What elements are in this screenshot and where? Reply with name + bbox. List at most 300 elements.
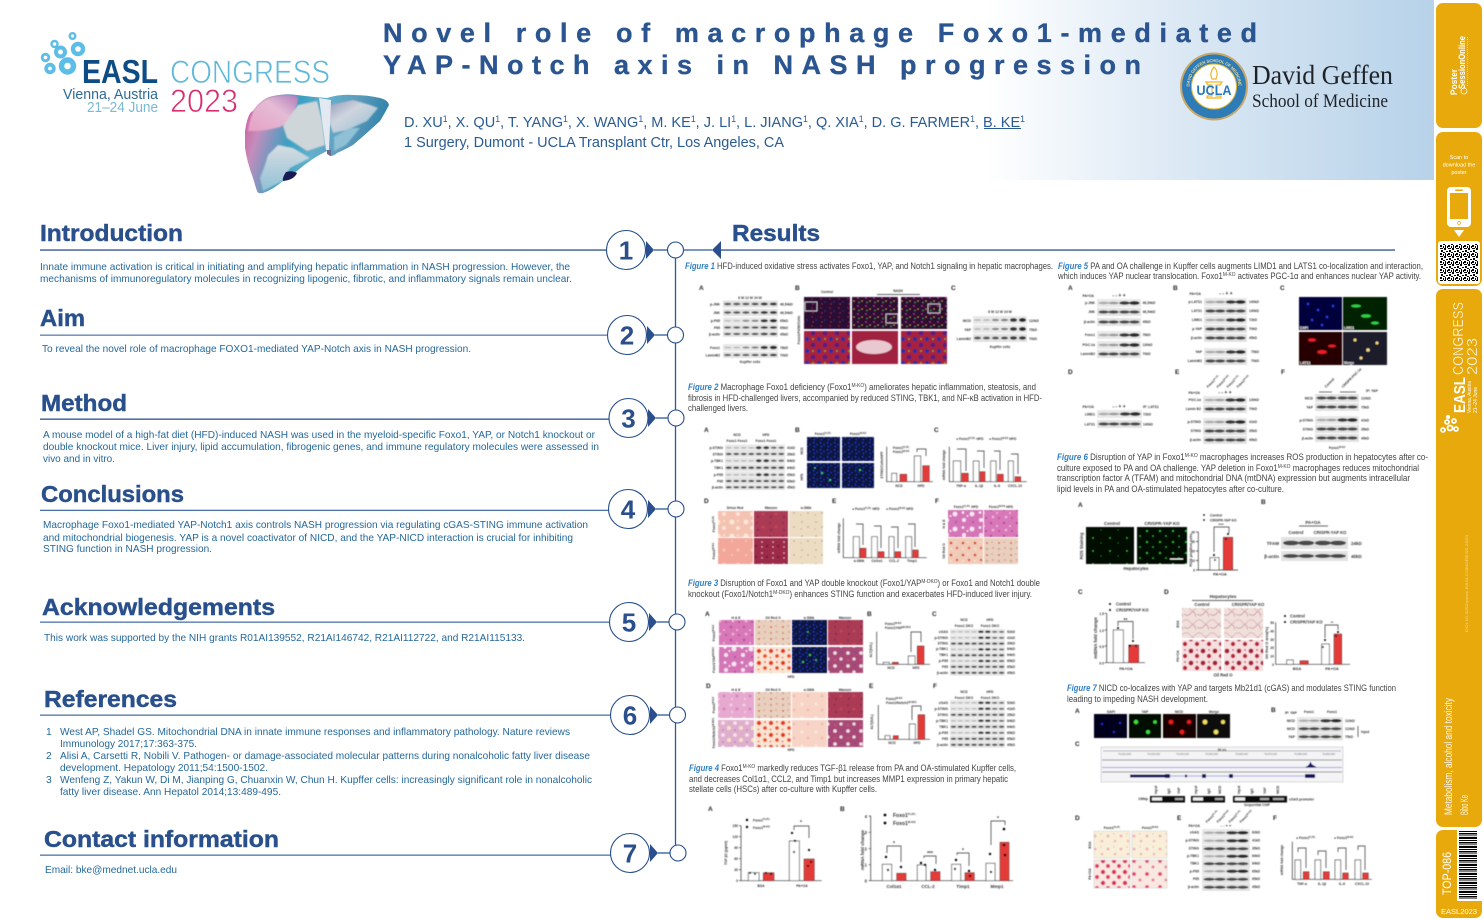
title: [383, 18, 1257, 80]
figure 3C western blot: p-TBK1: [936, 647, 948, 651]
figure 2A western blot: 84kD: [787, 466, 796, 470]
figure 3F western blot: p-P65: [939, 731, 948, 735]
figure 4B bar chart: mRNA fold change: 1: [865, 862, 868, 868]
figure 2A western blot: Foxo1 Foxo1: [727, 439, 748, 443]
figure 2: [688, 382, 1042, 564]
figure 5D immunoprecipitation blot: - - + +: [1112, 404, 1126, 410]
figure 2A western blot: 65kD: [787, 473, 796, 477]
figure 5B western blot: LaminB2: [1188, 359, 1202, 363]
figure 5B western blot: YAP: [1195, 350, 1203, 354]
figure 5 caption: Figure 5 PA and OA challenge in Kupffer cells augments LIMD1 and LATS1 co-localization and interaction,: [1058, 261, 1423, 271]
figure 3A histology: H & E: [731, 616, 741, 620]
figure 7E western blot: FL/FL: [1212, 809, 1219, 816]
figure 2F histology: M-KO: [999, 505, 1005, 508]
sidebar panel: congress: [1436, 289, 1482, 827]
figure 6A ROS staining and bar chart: [1078, 502, 1238, 576]
sidebar panel: poster session online: SessionOnline: [1457, 36, 1467, 89]
figure 2D histology: Masson: [765, 506, 777, 510]
authors and affiliation: 1: [859, 114, 864, 124]
figure 6: [1057, 452, 1428, 678]
figure 6 caption: M-KO: [1185, 453, 1198, 459]
figure 5A western blot: 45kD: [1142, 320, 1151, 324]
figure 7C genome track and gel: NICD: [1276, 785, 1280, 794]
figure 6A ROS staining and bar chart: Control: [1104, 521, 1120, 526]
figure 2A western blot: STING: [713, 452, 723, 456]
figure 5B western blot: p-LATS1: [1188, 300, 1202, 304]
EASL Congress logo: [42, 33, 330, 119]
figure 3F western blot: P65: [942, 737, 948, 741]
figure 3D histology: D: [706, 683, 711, 690]
figure 4B bar chart: mRNA fold change: Timp1: [956, 884, 970, 889]
figure 5F immunoprecipitation blot: F: [1281, 369, 1285, 376]
figure 6 caption: M-KO: [1278, 464, 1291, 470]
authors and affiliation: 1: [970, 114, 975, 124]
figure 3 caption: M-DKO: [773, 590, 790, 596]
figure 5E western blot: Foxo1: [1226, 379, 1236, 389]
figure 3C western blot: P65: [942, 665, 948, 669]
figure 3D histology: Masson: [839, 688, 851, 692]
figure 3E bar chart: E: [869, 683, 874, 690]
EASL Congress logo: Vienna, Austria: [63, 87, 159, 103]
sidebar panel: congress: EASL: [1452, 377, 1469, 413]
sidebar panel: abstract code and barcode: EASL2023: [1441, 907, 1477, 916]
figure 5C immunofluorescence: DAPI: [1300, 326, 1308, 330]
figure 5C immunofluorescence: [1280, 285, 1387, 365]
figure 7D histology: M-KO: [1152, 826, 1158, 829]
figure 3D histology: [706, 683, 863, 752]
figure 2A western blot: 45kD: [787, 486, 796, 490]
figure 5E western blot: FL/FL: [1233, 374, 1240, 381]
figure 5F immunoprecipitation blot: 41kD: [1361, 418, 1370, 422]
figure 6C bar chart: 0.5: [1099, 645, 1104, 649]
figure 2B immunofluorescence and bar chart: Foxo1: [850, 432, 860, 436]
figure 7F bar chart: IL-1β: [1318, 882, 1326, 886]
figure 3C western blot: Foxo1 DKO: [981, 624, 1000, 628]
panel: references: 3: [46, 775, 52, 786]
figure 6A ROS staining and bar chart: PA+OA: [1213, 572, 1227, 576]
figure 2B immunofluorescence and bar chart: Foxo1: [893, 450, 903, 454]
figure 4A bar chart: TGF-beta1: 30: [734, 868, 738, 872]
panel: references: Alisi A, Carsetti R, Nobili V. Pathogen- or damage-associated molecular patterns during nonalcoholic fatty liver disease: [60, 751, 590, 762]
figure 2B immunofluorescence and bar chart: B: [795, 427, 800, 434]
figure 7D histology: [1075, 815, 1167, 888]
figure 7B blot: 110kD: [1345, 727, 1355, 731]
figure 7C genome track and gel: 76,680,000: [1294, 752, 1308, 756]
figure 7E western blot: M-KO: [1246, 809, 1253, 816]
figure 7E western blot: Foxo1: [1239, 814, 1249, 824]
figure 6C bar chart: PA+OA: [1119, 666, 1133, 671]
figure 1A western blot: 65kD: [780, 319, 789, 323]
figure 7E western blot: Foxo1: [1216, 814, 1226, 824]
figure 5F immunoprecipitation blot: 75kD: [1361, 406, 1370, 410]
figure 7C genome track and gel: IgG: [1167, 788, 1171, 794]
sidebar panel: congress: Vienna, Austria: [1467, 380, 1473, 413]
figure 6B western blot: [1261, 499, 1363, 561]
figure 5 caption: activates PGC-1α and enhances nuclear YAP activity.: [1235, 271, 1421, 281]
icon: arrow down: [1454, 230, 1464, 237]
figure 5 caption: which induces YAP nuclear translocation. Foxo1: [1058, 271, 1245, 281]
figure 1A western blot: [699, 285, 793, 364]
figure 7E western blot: TBK1: [1190, 862, 1199, 866]
figure 3C western blot: p-STING: [934, 636, 948, 640]
figure 7C genome track and gel: Input: [1154, 785, 1158, 794]
figure 3A histology: α-SMA: [804, 616, 815, 620]
figure 7D histology: D: [1075, 815, 1080, 822]
figure 1B immunofluorescence: B: [795, 285, 800, 292]
figure 5A western blot: - - + +: [1112, 293, 1126, 299]
figure 2E bar chart: mRNA fold change: [837, 523, 841, 553]
figure 3F western blot: 35kD: [1007, 713, 1016, 717]
figure 5B western blot: LIMD1: [1192, 318, 1202, 322]
figure 7F bar chart: TNF-α: [1297, 882, 1308, 886]
figure 1A western blot: 78kD: [780, 346, 789, 350]
figure 7D histology: Foxo1: [1142, 826, 1152, 830]
step marker 6: 6: [623, 700, 637, 730]
figure 6D oil red O and bar chart: BSA: [1293, 666, 1301, 671]
authors and affiliation: , X. QU: [448, 114, 495, 131]
figure 4B bar chart: mRNA fold change: 2: [865, 846, 868, 852]
authors and affiliation: 1: [731, 114, 736, 124]
figure 2D histology: FL/FL: [712, 515, 715, 522]
figure 6D oil red O and bar chart: Control: [1290, 614, 1305, 618]
panel: results heading: Results: [732, 220, 820, 246]
panel: method: vivo and in vitro.: [43, 454, 115, 465]
figure 7D histology: Foxo1: [1104, 826, 1114, 830]
figure 4 caption: [689, 763, 1016, 794]
authors and affiliation: [404, 114, 1025, 151]
figure 3D histology: H & E: [731, 688, 741, 692]
icon: liver illustration: [245, 94, 389, 193]
figure 5E western blot: PGC-1α: [1189, 398, 1202, 402]
figure 6 caption: Figure 6 Disruption of YAP in Foxo1: [1057, 452, 1195, 462]
figure 7C genome track and gel: 76,630,000: [1147, 752, 1161, 756]
figure 2 caption: fibrosis in HFD-challenged livers, accompanied by reduced STING, TBK1, and NF-κB activation in HFD-: [688, 393, 1042, 403]
figure 7B blot: NICD: [1287, 719, 1296, 723]
sidebar panel: scan to download: Scan to: [1450, 155, 1468, 161]
figure 7A immunofluorescence: Merge: [1209, 710, 1219, 714]
figure 2F histology: Foxo1: [989, 505, 999, 509]
figure 5: [1057, 261, 1423, 450]
figure 5B western blot: 70kD: [1251, 359, 1260, 363]
figure 1A western blot: Foxo1: [710, 346, 720, 350]
figure 3F western blot: 52kD: [1007, 701, 1016, 705]
authors and affiliation: , X. WANG: [568, 114, 638, 131]
figure 1C western blot: YAP: [964, 328, 972, 332]
figure 5E western blot: 35kD: [1249, 429, 1258, 433]
authors and affiliation: 1: [495, 114, 500, 124]
figure 4 caption: M-KO: [743, 764, 756, 770]
figure 2 caption: [688, 382, 1042, 413]
figure 2 caption: M-KO: [851, 383, 865, 389]
figure 3C western blot: C: [932, 611, 937, 618]
panel: references: Immunology 2017;17:363-375.: [60, 739, 197, 750]
figure 2A western blot: 35kD: [787, 452, 796, 456]
figure 2E bar chart: FL/FL: [865, 507, 872, 510]
figure 5B western blot: p-YAP: [1192, 327, 1203, 331]
figure 2A western blot: HFD: [763, 433, 770, 437]
panel: acknowledgements: [40, 594, 685, 644]
figure 5E western blot: 45kD: [1249, 438, 1258, 442]
figure 3A histology: A: [705, 611, 710, 618]
figure 2A western blot: 41kD: [787, 446, 796, 450]
figure 6D oil red O and bar chart: BSA: [1176, 620, 1180, 628]
figure 7 caption: leading to impeding NASH development.: [1067, 694, 1208, 704]
figure 1 caption: Figure 1 HFD-induced oxidative stress activates Foxo1, YAP, and Notch1 signaling in hepatic macrophages.: [685, 261, 1053, 271]
figure 7B blot: Foxo1: [1304, 710, 1314, 714]
figure 7B blot: IP: YAP: [1285, 711, 1298, 715]
sidebar panel: scan to download: download the: [1443, 162, 1475, 168]
figure 7E western blot: 35kD: [1252, 846, 1261, 850]
figure 5E western blot: M-KO: [1223, 374, 1230, 381]
David Geffen School of Medicine wordmark: David Geffen: [1252, 60, 1393, 90]
figure 7B blot: Input: [1361, 730, 1370, 734]
figure 3F western blot: 65kD: [1007, 737, 1016, 741]
figure 7E western blot: cGAS: [1190, 830, 1200, 834]
figure 5F immunoprecipitation blot: Control: [1324, 377, 1335, 389]
figure 6D oil red O and bar chart: D: [1164, 589, 1169, 596]
figure 4B bar chart: mRNA fold change: 3: [865, 830, 868, 835]
sidebar panel: poster session online: [1436, 3, 1482, 128]
figure 5C immunofluorescence: Merge: [1344, 361, 1354, 365]
step marker 6: [610, 696, 686, 734]
figure 1A western blot: 46,54kD: [780, 302, 793, 306]
authors and affiliation: 1: [638, 114, 643, 124]
figure 6D oil red O and bar chart: [1164, 589, 1350, 678]
figure 2D histology: M-KO: [712, 543, 715, 549]
figure 3E bar chart: ALT(IU/L): [870, 714, 874, 730]
panel: references: 1: [46, 727, 52, 738]
authors and affiliation: , D. G. FARMER: [864, 114, 970, 131]
figure 5A western blot: 78kD: [1142, 333, 1151, 337]
authors and affiliation: , M. KE: [643, 114, 691, 131]
figure 7E western blot: p-TBK1: [1187, 854, 1199, 858]
figure 6C bar chart: CRISPR/YAP KO: [1116, 608, 1149, 612]
figure 5B western blot: LATS1: [1192, 309, 1202, 313]
figure 3A histology: M-KO: [712, 625, 715, 631]
figure 4B bar chart: mRNA fold change: Foxo1: [893, 821, 908, 827]
figure 4: [689, 763, 1016, 889]
figure 5B western blot: - - + +: [1219, 291, 1233, 297]
sidebar panel: congress: Metabolism, alcohol and toxicity: [1443, 698, 1455, 815]
figure 7B blot: 110kD: [1345, 719, 1355, 723]
figure 3 caption: Figure 3 Disruption of Foxo1 and YAP double knockout (Foxo1/YAP: [688, 578, 948, 588]
figure 6D oil red O and bar chart: **: [1331, 621, 1334, 625]
figure 3F western blot: 84kD: [1007, 725, 1016, 729]
figure 1C western blot: 8 W 12 W 24 W: [988, 310, 1013, 314]
icon: phone: [1447, 187, 1471, 227]
figure 1A western blot: 45kD: [780, 332, 789, 336]
figure 5A western blot: [1068, 285, 1156, 358]
figure 3C western blot: 65kD: [1007, 659, 1016, 663]
step marker 2: 2: [620, 320, 634, 350]
figure 3A histology: Foxo1: [712, 631, 716, 641]
figure 3A histology: M-DKO: [712, 647, 715, 655]
figure 3C western blot: [932, 611, 1016, 676]
figure 2C bar chart: IL-1β: [975, 484, 983, 488]
figure 7B blot: YAP: [1288, 735, 1296, 739]
figure 3 caption: ) or Foxo1 and Notch1 double: [937, 578, 1040, 588]
UCLA seal: DAVID GEFFEN SCHOOL OF MEDICINE: [1186, 59, 1242, 86]
figure 4 caption: and decreases Col1α1, CCL2, and Timp1 but increases MMP1 expression in primary hepatic: [689, 774, 1009, 784]
figure 5E western blot: 41kD: [1249, 420, 1258, 424]
figure 2B immunofluorescence and bar chart: NCD: [895, 484, 903, 488]
figure 7: [1067, 683, 1396, 891]
figure 4B bar chart: mRNA fold change: [840, 806, 1013, 889]
figure 7C genome track and gel: cGAS promoter: [1289, 798, 1315, 802]
figure 5E western blot: Foxo1: [1206, 379, 1216, 389]
panel: contact information: [40, 826, 686, 876]
figure 4A bar chart: TGF-beta1: [708, 806, 822, 888]
QR code: [1438, 241, 1480, 284]
figure 3F western blot: STING: [938, 713, 948, 717]
figure 4A bar chart: TGF-beta1: PA+OA: [796, 884, 808, 888]
title: Novel role of macrophage Foxo1-mediated: [383, 18, 1257, 48]
figure 7F bar chart: mRNA fold change: [1280, 845, 1284, 875]
panel: aim: [40, 305, 684, 355]
figure 6C bar chart: mtDNA fold change: [1093, 617, 1098, 659]
figure 6B western blot: TFAM: [1267, 541, 1279, 546]
figure 3F western blot: NCD: [960, 690, 968, 694]
figure 2B immunofluorescence and bar chart: Foxo1: [815, 432, 825, 436]
panel: references: West AP, Shadel GS. Mitochondrial DNA in innate immune responses and inflammatory pathology. Nature reviews: [60, 727, 570, 738]
sidebar panel: scan to download: [1436, 132, 1482, 286]
figure 3D histology: M-KO: [712, 697, 715, 703]
authors and affiliation: 1 Surgery, Dumont - UCLA Transplant Ctr, Los Angeles, CA: [404, 134, 784, 151]
figure 6B western blot: CRISPR-YAP KO: [1314, 530, 1347, 535]
figure 3B bar chart: M-KO: [895, 622, 902, 625]
figure 7F bar chart: M-KO: [1347, 836, 1353, 839]
figure 5E western blot: - - + +: [1218, 390, 1232, 396]
figure 7E western blot: 41kD: [1252, 838, 1261, 842]
figure 7E western blot: 65kD: [1252, 877, 1261, 881]
figure 3F western blot: β-actin: [937, 743, 948, 747]
figure 2A western blot: [704, 427, 796, 490]
figure 7E western blot: Foxo1: [1228, 814, 1238, 824]
figure 2F histology: HFD: [1005, 505, 1014, 509]
figure 3B bar chart: M-DKO: [903, 626, 911, 629]
figure 5A western blot: p-JNK: [1085, 301, 1096, 305]
figure 3F western blot: [933, 683, 1016, 748]
figure 2C bar chart: IL-6: [994, 484, 1000, 488]
figure 4B bar chart: mRNA fold change: *: [893, 841, 895, 847]
figure 3C western blot: 45kD: [1007, 671, 1016, 675]
figure 2F histology: HFD: [970, 505, 979, 509]
figure 3D histology: Foxo1/Notch1: [712, 726, 716, 748]
authors and affiliation: , T. YANG: [500, 114, 563, 131]
step marker 7: 7: [623, 838, 637, 868]
figure 2E bar chart: [832, 498, 927, 563]
figure 5C immunofluorescence: C: [1280, 285, 1285, 292]
sidebar panel: congress: Bibo Ke: [1459, 795, 1471, 815]
figure 3C western blot: cGAS: [939, 630, 949, 634]
figure 3C western blot: 52kD: [1007, 630, 1016, 634]
figure 3D histology: HFD: [788, 748, 795, 752]
EASL Congress logo: EASL: [82, 53, 158, 90]
figure 5B western blot: [1173, 285, 1260, 365]
figure 6D oil red O and bar chart: CRISPR/YAP KO: [1290, 620, 1323, 624]
figure 7C genome track and gel: YAP: [1177, 787, 1181, 794]
figure 4A bar chart: TGF-beta1: 0: [736, 879, 738, 883]
figure 2C bar chart: M-KO: [1002, 437, 1008, 440]
figure 6A ROS staining and bar chart: ****: [1218, 523, 1224, 527]
figure 6B western blot: B: [1261, 499, 1266, 506]
figure 3C western blot: 41kD: [1007, 636, 1016, 640]
figure 2A western blot: β-actin: [712, 486, 723, 490]
figure 2A western blot: p-STING: [709, 446, 723, 450]
figure 7E western blot: 62kD: [1252, 830, 1261, 834]
figure 4B bar chart: mRNA fold change: *: [962, 848, 964, 854]
figure 2F histology: Foxo1: [954, 505, 964, 509]
figure 7E western blot: FL/FL: [1235, 809, 1242, 816]
figure 7C genome track and gel: 76,690,000: [1322, 752, 1336, 756]
panel: references: References: [44, 686, 177, 712]
figure 2C bar chart: C: [934, 427, 939, 434]
figure 7E western blot: Foxo1: [1205, 814, 1215, 824]
figure 7C genome track and gel: 76,660,000: [1235, 752, 1249, 756]
figure 3C western blot: NCD: [960, 618, 968, 622]
figure 3B bar chart: Foxo1: [885, 622, 895, 626]
figure 6 caption: lipid levels in PA and OA-stimulated hepatocytes after co-culture.: [1057, 484, 1284, 494]
figure 5A western blot: 46,54kD: [1142, 301, 1156, 305]
figure 6B western blot: β-actin: [1264, 554, 1279, 559]
figure 6A ROS staining and bar chart: A: [1078, 502, 1083, 509]
figure 7A immunofluorescence: NICD: [1175, 710, 1184, 714]
figure 5A western blot: β-actin: [1084, 320, 1095, 324]
figure 2F histology: Oil Red O: [942, 543, 946, 559]
figure 5D immunoprecipitation blot: LIMD1: [1085, 412, 1095, 416]
figure 7B blot: NICD: [1287, 727, 1296, 731]
figure 6 caption: culture exposed to PA and OA challenge. YAP deletion in Foxo1: [1057, 463, 1305, 473]
figure 3E bar chart: [869, 683, 930, 745]
figure 5E western blot: Foxo1: [1236, 379, 1246, 389]
step marker 1: 1: [619, 236, 633, 266]
sidebar panel: congress: 2023: [1464, 338, 1481, 375]
figure 1A western blot: p-P65: [711, 319, 720, 323]
figure 7C genome track and gel: 196bp: [1138, 797, 1148, 801]
figure 5F immunoprecipitation blot: STING: [1303, 428, 1313, 432]
step marker 5: 5: [622, 608, 636, 638]
figure 2E bar chart: Col1α1: [871, 559, 883, 563]
header background: [0, 0, 1434, 180]
EASL Congress logo: CONGRESS: [170, 54, 330, 90]
authors and affiliation: 1: [803, 114, 808, 124]
panel: method: [40, 390, 684, 465]
figure 3E bar chart: Foxo1/Notch1: [886, 701, 908, 705]
figure 4B bar chart: mRNA fold change: B: [840, 806, 845, 813]
figure 7E western blot: β-actin: [1188, 885, 1199, 889]
figure 2A western blot: 84kD: [787, 459, 796, 463]
figure 7D histology: FL/FL: [1114, 826, 1121, 829]
sidebar panel: abstract code and barcode: TOP-086: [1440, 852, 1454, 895]
figure 2C bar chart: ● Foxo1: [956, 437, 969, 441]
figure 4A bar chart: TGF-beta1: FL/FL: [763, 817, 770, 821]
figure 7C genome track and gel: Sequential ChIP: [1244, 803, 1271, 807]
figure 3C western blot: HFD: [987, 618, 994, 622]
figure 1A western blot: P65: [714, 326, 720, 330]
figure 4A bar chart: TGF-beta1: Foxo1: [753, 826, 763, 830]
figure 3E bar chart: NCD: [888, 741, 896, 745]
figure 4 caption: markedly reduces TGF-β1 release from PA and OA-stimulated Kupffer cells,: [755, 763, 1016, 773]
figure 3C western blot: β-actin: [937, 671, 948, 675]
panel: references: 2: [46, 751, 52, 762]
figure 2A western blot: P65: [717, 480, 723, 484]
figure 1B immunofluorescence: [795, 285, 947, 364]
figure 3C western blot: 65kD: [1007, 665, 1016, 669]
panel: method: A mouse model of a high-fat diet (HFD)-induced NASH was used in the myeloid-specific Foxo1, YAP, or Notch1 knockout or: [43, 430, 596, 441]
figure 3C western blot: 84kD: [1007, 653, 1016, 657]
panel: references: fatty liver disease. Ann Hepatol 2014;13:489-495.: [60, 787, 281, 798]
panel: introduction: Introduction: [40, 220, 183, 246]
